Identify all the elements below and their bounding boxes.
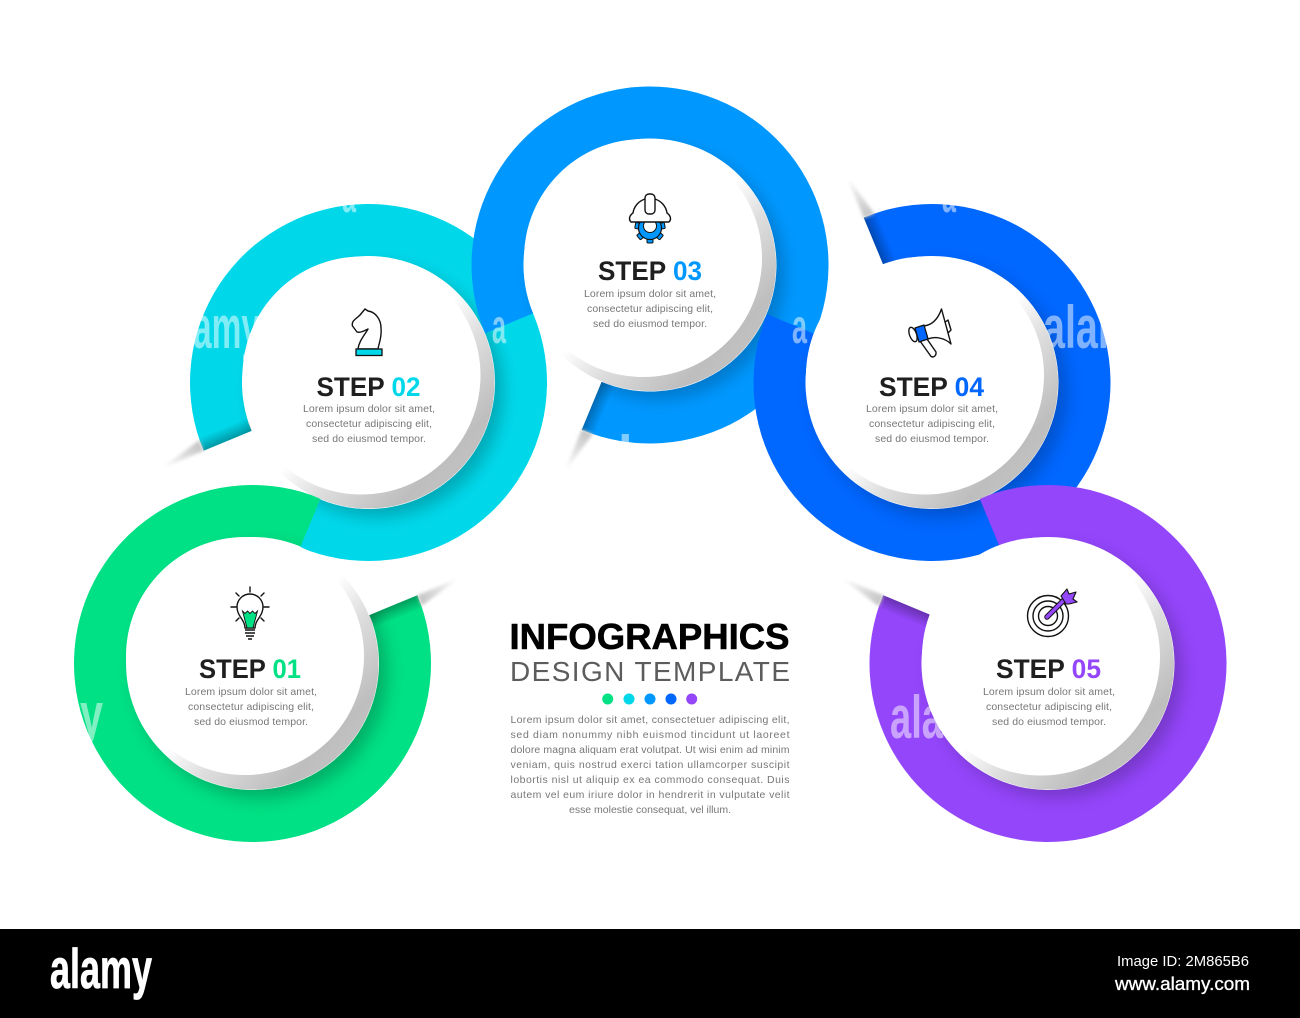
text block: step 01 <box>185 686 317 728</box>
subtitle: DESIGN TEMPLATE <box>510 656 790 687</box>
text block: description: sed diam nonummy nibh euismod tincidunt ut laoreet <box>510 729 790 741</box>
icon: megaphone <box>907 309 951 357</box>
panel: step 01 <box>126 537 378 790</box>
icon: chess knight <box>352 309 382 356</box>
text block: step 02: Lorem ipsum dolor sit amet, <box>303 403 435 415</box>
text block: description: veniam, quis nostrud exerci tation ullamcorper suscipit <box>510 759 790 771</box>
watermark letters on rings: y <box>80 681 103 748</box>
footer image id: Image ID: 2M865B6 <box>1117 953 1249 970</box>
watermark letters on rings: alam <box>1043 294 1133 361</box>
icon: helmet with gear <box>630 194 670 243</box>
heading: step 05: STEP 05 <box>996 654 1101 684</box>
heading: step 04: STEP 04 <box>879 372 984 402</box>
text block: step 01: sed do eiusmod tempor. <box>194 716 308 728</box>
ring: step 03 light blue <box>472 86 829 477</box>
text block: description: Lorem ipsum dolor sit amet, consectetuer adipiscing elit, <box>510 714 790 726</box>
text block: step 05: consectetur adipiscing elit, <box>986 701 1112 713</box>
text block: step 05 <box>983 686 1115 728</box>
text block: step 01: consectetur adipiscing elit, <box>188 701 314 713</box>
text block: step 04 <box>866 403 998 445</box>
text block: step 03: sed do eiusmod tempor. <box>593 318 707 330</box>
text block: description: lobortis nisl ut aliquip ex ea commodo consequat. Duis <box>510 774 790 786</box>
text block: description: esse molestie consequat, vel illum. <box>569 804 731 816</box>
heading: step 03: STEP 03 <box>598 256 702 286</box>
icon: target with dart <box>1028 589 1077 636</box>
text block: step 01: Lorem ipsum dolor sit amet, <box>185 686 317 698</box>
watermark letters on rings: la <box>618 424 663 491</box>
watermark letters on rings: a <box>942 170 956 223</box>
text block: step 03 <box>584 288 716 330</box>
text block: step 04: Lorem ipsum dolor sit amet, <box>866 403 998 415</box>
panel: step 02 <box>242 256 494 508</box>
heading: step 01: STEP 01 <box>199 654 301 684</box>
panel: step 03 <box>524 139 776 391</box>
watermark letters on rings: amy <box>193 294 260 361</box>
text block: step 02: consectetur adipiscing elit, <box>306 418 432 430</box>
text block: description <box>510 714 790 816</box>
icon: light bulb <box>231 587 269 639</box>
ring: step 01 green <box>74 485 465 842</box>
footer website: www.alamy.com <box>1114 974 1250 994</box>
text block: step 03: consectetur adipiscing elit, <box>587 303 713 315</box>
text block: step 02 <box>303 403 435 445</box>
text block: step 05: sed do eiusmod tempor. <box>992 716 1106 728</box>
ring: step 04 dark blue <box>754 170 1111 561</box>
footer logo: alamy <box>50 937 152 1000</box>
text block: step 04: consectetur adipiscing elit, <box>869 418 995 430</box>
text block: step 03: Lorem ipsum dolor sit amet, <box>584 288 716 300</box>
watermark letters on rings: a <box>792 301 807 354</box>
panel: step 05 <box>922 538 1174 790</box>
text block: step 02: sed do eiusmod tempor. <box>312 433 426 445</box>
ring: step 05 purple <box>836 485 1227 842</box>
text block: step 05: Lorem ipsum dolor sit amet, <box>983 686 1115 698</box>
panel: step 04 <box>806 256 1058 508</box>
footer bar <box>0 929 1300 1018</box>
text block: description: autem vel eum iriure dolor in hendrerit in vulputate velit <box>510 789 790 801</box>
watermark letters on rings: a <box>492 301 506 354</box>
text block: description: dolore magna aliquam erat volutpat. Ut wisi enim ad minim <box>510 744 790 756</box>
watermark letters on rings: a <box>342 170 356 223</box>
text block: step 04: sed do eiusmod tempor. <box>875 433 989 445</box>
watermark letters on rings: ala <box>890 684 943 751</box>
ring: step 02 cyan <box>156 204 547 561</box>
title: INFOGRAPHICS <box>510 616 790 657</box>
watermark letters on rings <box>80 170 1133 751</box>
colour dots <box>602 694 697 704</box>
heading: step 02: STEP 02 <box>316 372 420 402</box>
